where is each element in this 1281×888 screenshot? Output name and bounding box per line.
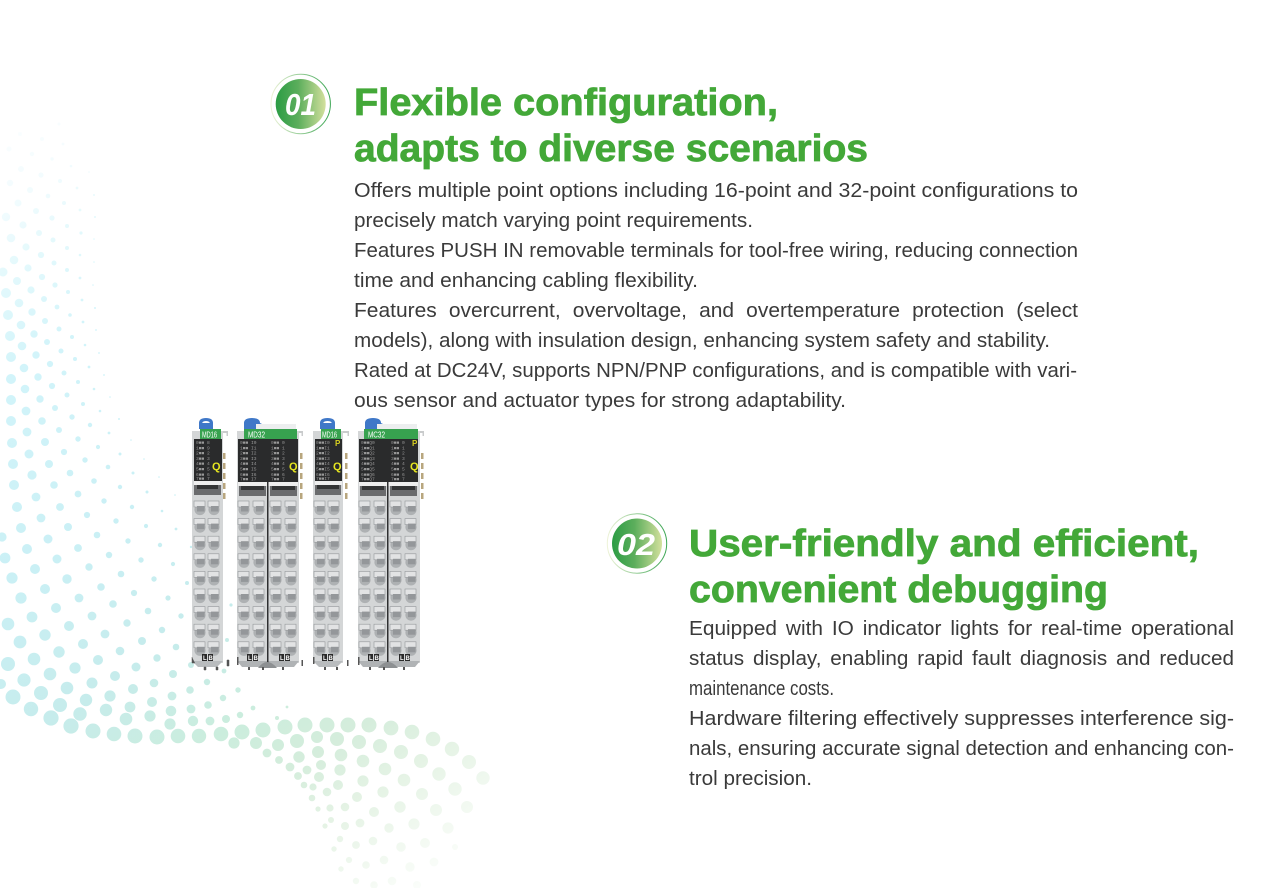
module MD16 left: MD16 <box>202 430 217 440</box>
heading 01: Flexible configuration, <box>354 82 778 124</box>
text block: flexible configuration description: Rated at DC24V, supports NPN/PNP configurations, and is compatible with vari- <box>354 360 1077 382</box>
module MC32: 0■■ 0 <box>391 440 405 446</box>
text block: flexible configuration description: time and enhancing cabling flexibility. <box>354 270 698 292</box>
module MD16 left: 3■■ 3 <box>196 456 210 462</box>
text block: flexible configuration description <box>354 180 1078 412</box>
text block: flexible configuration description: Offers multiple point options including 16-point and 32-point configurations to <box>354 180 1078 202</box>
module MC32: 5■■Q5 <box>361 466 375 472</box>
module MD32: 7■■ I7 <box>240 476 257 482</box>
text block: debugging description: Equipped with IO indicator lights for real-time operational <box>689 618 1234 640</box>
module MC32: 7■■Q7 <box>361 476 375 482</box>
module MD32 <box>237 418 303 670</box>
module MD16 left: 1■■ 9 <box>196 445 210 451</box>
module MD32: B <box>254 656 258 662</box>
module MC32: Q <box>410 461 419 473</box>
module MD32: 6■■ 6 <box>271 472 285 478</box>
heading 02: convenient debugging <box>689 569 1108 611</box>
module MD16 right <box>313 418 349 670</box>
product image: IO modules <box>192 418 424 670</box>
module MC32: P <box>412 439 418 448</box>
module MC32: L <box>400 656 404 662</box>
module MD16 left: 0■■ 8 <box>196 440 210 446</box>
module MC32: 1■■ 1 <box>391 445 405 451</box>
module MD32: 2■■ I2 <box>240 451 257 457</box>
module MD32: 6■■ I6 <box>240 472 257 478</box>
module MD32: 3■■ 3 <box>271 456 285 462</box>
badge 02 <box>607 514 667 573</box>
module MD32: L <box>280 656 284 662</box>
module MD32: 4■■ I4 <box>240 461 257 467</box>
module MC32: L <box>369 656 373 662</box>
module MD32: L <box>248 656 252 662</box>
heading 02: User-friendly and efficient, <box>689 523 1199 565</box>
module MD16 left: 5■■ 5 <box>196 466 210 472</box>
module MD16 left: 7■■ 7 <box>196 476 210 482</box>
module MD16 right: B <box>328 656 334 662</box>
text block: flexible configuration description: precisely match varying point requirements. <box>354 210 753 232</box>
module MD32: 4■■ 4 <box>271 461 285 467</box>
module MD16 right: 7■■I7 <box>316 476 330 482</box>
module MD16 right: 5■■I5 <box>316 466 330 472</box>
module MD16 left: 4■■ 4 <box>196 461 210 467</box>
module MD32: 5■■ 5 <box>271 466 285 472</box>
text block: flexible configuration description: Features overcurrent, overvoltage, and overtemperature protection (select <box>354 300 1078 322</box>
module MC32: B <box>374 656 380 662</box>
module MD32: 1■■ I1 <box>240 445 257 451</box>
module MD32: Q <box>289 461 298 473</box>
text block: flexible configuration description: models), along with insulation design, enhancing system safety and stability. <box>354 330 1050 352</box>
module MD16 left: B <box>208 656 214 662</box>
heading 02 <box>689 523 1199 611</box>
module MD32: B <box>286 656 290 662</box>
module MC32: 4■■ 4 <box>391 461 405 467</box>
module MD16 right: 2■■I2 <box>316 451 330 457</box>
module MD16 right: 1■■I1 <box>316 445 330 451</box>
module MC32: B <box>406 656 410 662</box>
text block: debugging description: nals, ensuring accurate signal detection and enhancing con- <box>689 738 1234 760</box>
module MD16 right: 6■■I6 <box>316 472 330 478</box>
badge 02: 02 <box>617 527 655 562</box>
module MC32: 6■■ 6 <box>391 472 405 478</box>
text block: debugging description: trol precision. <box>689 768 812 790</box>
heading 01 <box>354 82 868 170</box>
module MD16 right: MD16 <box>322 430 337 440</box>
module MC32: 7■■ 7 <box>391 476 405 482</box>
module MC32: 4■■Q4 <box>361 461 375 467</box>
badge 01: 01 <box>285 87 316 122</box>
module MD16 right: 0■■I0 <box>316 440 330 446</box>
module MD16 left: Q <box>212 461 221 473</box>
module MC32: 5■■ 5 <box>391 466 405 472</box>
module MD16 left: 6■■ 6 <box>196 472 210 478</box>
text block: flexible configuration description: Features PUSH IN removable terminals for tool-free wiring, reducing connection <box>354 240 1078 262</box>
module MD16 right: 3■■I3 <box>316 456 330 462</box>
background dot pattern <box>0 122 490 888</box>
module MD32: MD32 <box>248 430 265 440</box>
badge 01 <box>271 74 330 134</box>
module MD16 left: L <box>203 656 207 662</box>
module MC32 <box>358 418 424 670</box>
module MC32: 0■■Q0 <box>361 440 375 446</box>
module MD16 left <box>192 418 229 670</box>
module MD32: 1■■ 1 <box>271 445 285 451</box>
module MC32: 2■■ 2 <box>391 451 405 457</box>
module MC32: 6■■Q6 <box>361 472 375 478</box>
text block: flexible configuration description: ous sensor and actuator types for strong adaptability. <box>354 390 846 412</box>
module MD16 right: 4■■I4 <box>316 461 330 467</box>
module MC32: MC32 <box>368 430 385 440</box>
module MD32: 3■■ I3 <box>240 456 257 462</box>
module MC32: 2■■Q2 <box>361 451 375 457</box>
module MC32: 3■■Q3 <box>361 456 375 462</box>
module MD16 left: 2■■ 2 <box>196 451 210 457</box>
heading 01: adapts to diverse scenarios <box>354 128 868 170</box>
module MD32: 5■■ I5 <box>240 466 257 472</box>
module MD32: 7■■ 7 <box>271 476 285 482</box>
module MD16 right: L <box>323 656 327 662</box>
text block: debugging description: status display, enabling rapid fault diagnosis and reduced <box>689 648 1234 670</box>
module MD32: 2■■ 2 <box>271 451 285 457</box>
text block: debugging description <box>689 618 1234 790</box>
module MD32: 0■■ I0 <box>240 440 257 446</box>
module MC32: 3■■ 3 <box>391 456 405 462</box>
module MD16 right: P <box>335 439 341 448</box>
module MC32: 1■■Q1 <box>361 445 375 451</box>
text block: debugging description: maintenance costs. <box>689 678 834 700</box>
module MD32: 0■■ 0 <box>271 440 285 446</box>
text block: debugging description: Hardware filtering effectively suppresses interference sig- <box>689 708 1234 730</box>
module MD16 right: Q <box>333 461 342 473</box>
